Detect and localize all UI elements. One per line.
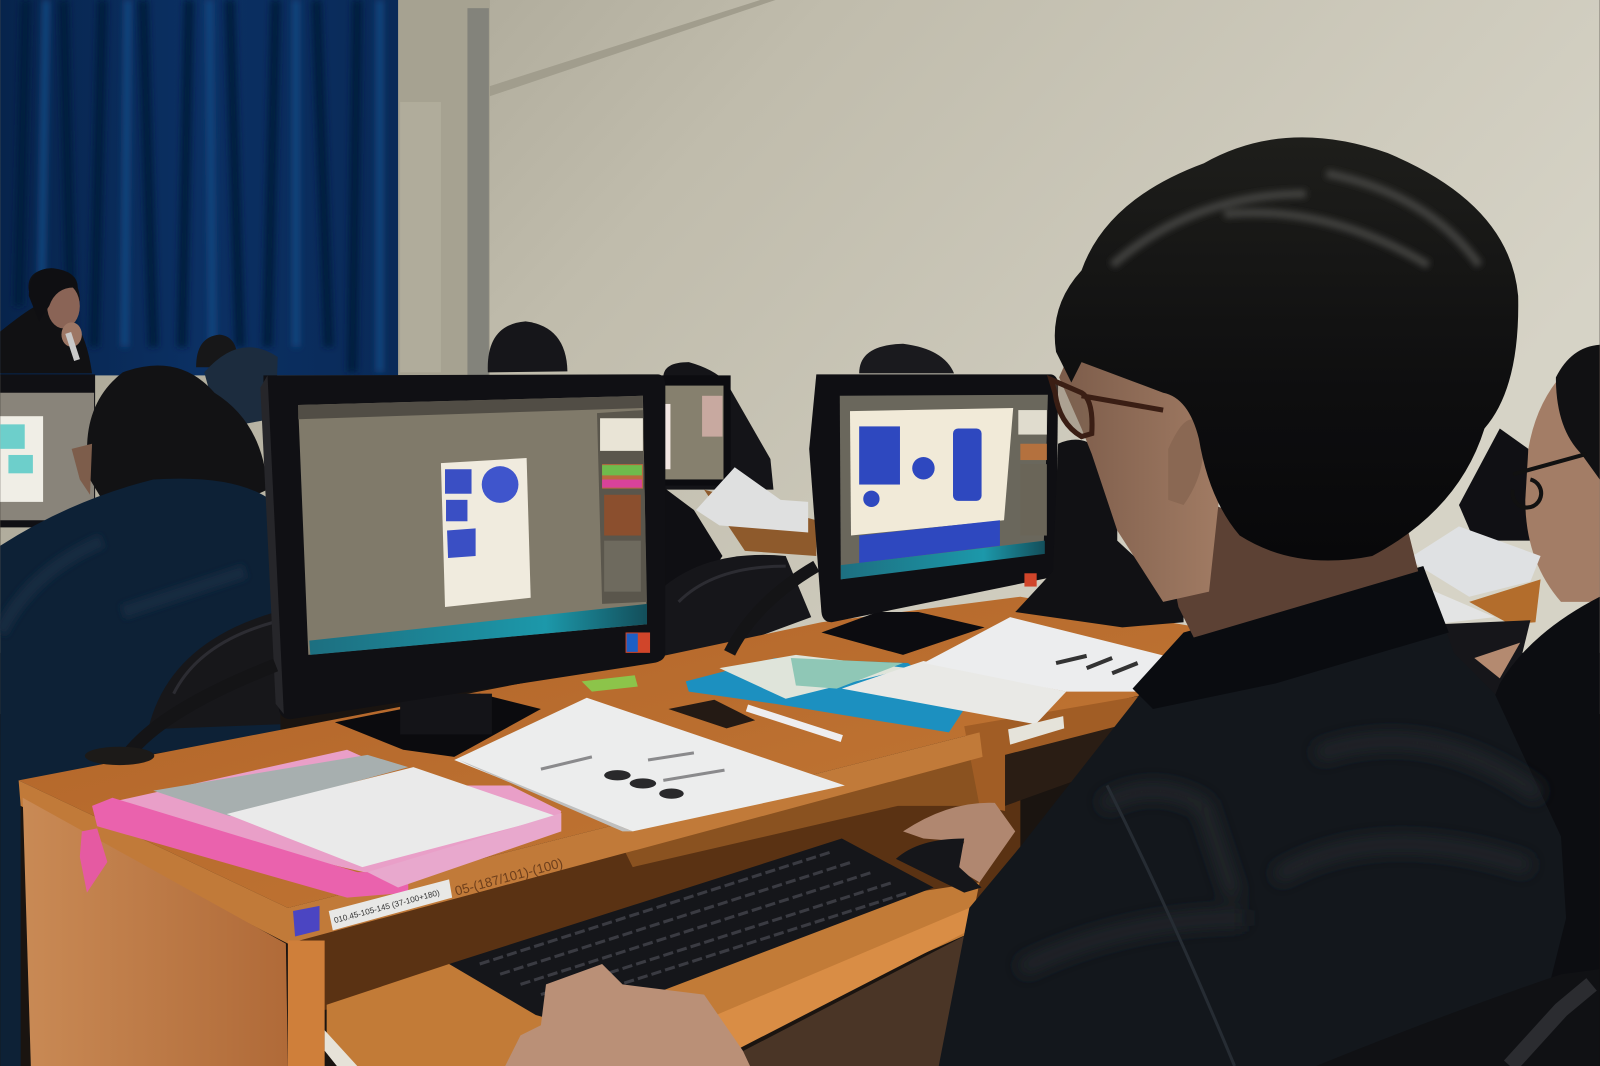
glasses (1051, 379, 1163, 437)
front edge of desk (19, 732, 983, 944)
hand on keyboard (505, 964, 750, 1066)
desk side panel (23, 798, 288, 1066)
cable sleeve left (128, 665, 276, 755)
phone (668, 700, 755, 728)
papers behind (696, 467, 808, 532)
rear student jacket (653, 479, 722, 658)
chair front right (1316, 969, 1600, 1066)
desk labels (329, 855, 564, 930)
pen on desk (747, 708, 842, 739)
pink folder with papers (80, 750, 561, 898)
screen (298, 396, 647, 655)
right monitor (809, 374, 1058, 622)
desk labels: 010.45-105-145 (37-100+180) (333, 888, 441, 925)
student left back (0, 347, 281, 1066)
desk labels: 05-(187/101)-(100) (453, 855, 564, 899)
cable sleeve right (730, 566, 816, 653)
lower dark background (0, 653, 1600, 1066)
right desk label (1008, 716, 1064, 745)
area beneath tray (714, 933, 969, 1066)
left background monitor (0, 374, 95, 527)
main documents open (454, 698, 845, 831)
hand on mouse (903, 803, 1015, 882)
right second desk front (964, 694, 1153, 811)
ear (1168, 419, 1203, 505)
right student far (1459, 345, 1600, 602)
column and pipe (393, 0, 490, 377)
screen (840, 395, 1048, 579)
backpack behind right monitor (1015, 440, 1184, 627)
blue curtain (0, 0, 398, 375)
mid papers right desk (686, 617, 1173, 732)
presenter (0, 268, 92, 373)
main desk top (19, 597, 1199, 908)
blue folder (686, 658, 964, 732)
mouse (896, 839, 982, 893)
face (1059, 326, 1224, 602)
right student jacket (1479, 597, 1600, 1066)
wall (0, 0, 1600, 714)
blue square on desk (293, 906, 320, 936)
student main (939, 137, 1566, 1066)
under desk recess (288, 755, 1020, 1010)
papers right far (1408, 526, 1541, 704)
hair (1055, 137, 1518, 561)
shirt body (939, 566, 1566, 1066)
keyboard (449, 839, 934, 1025)
rear desk strip (704, 490, 816, 556)
rear monitor centre (653, 375, 731, 486)
neck (1153, 479, 1418, 638)
keyboard tray (327, 882, 980, 1066)
monitor base main (335, 694, 541, 757)
main monitor (260, 374, 665, 719)
green sticker label (582, 675, 638, 692)
lit underside of desk (623, 757, 980, 867)
distant students heads (196, 321, 954, 490)
chairs (148, 555, 811, 729)
right monitor base (821, 612, 985, 655)
